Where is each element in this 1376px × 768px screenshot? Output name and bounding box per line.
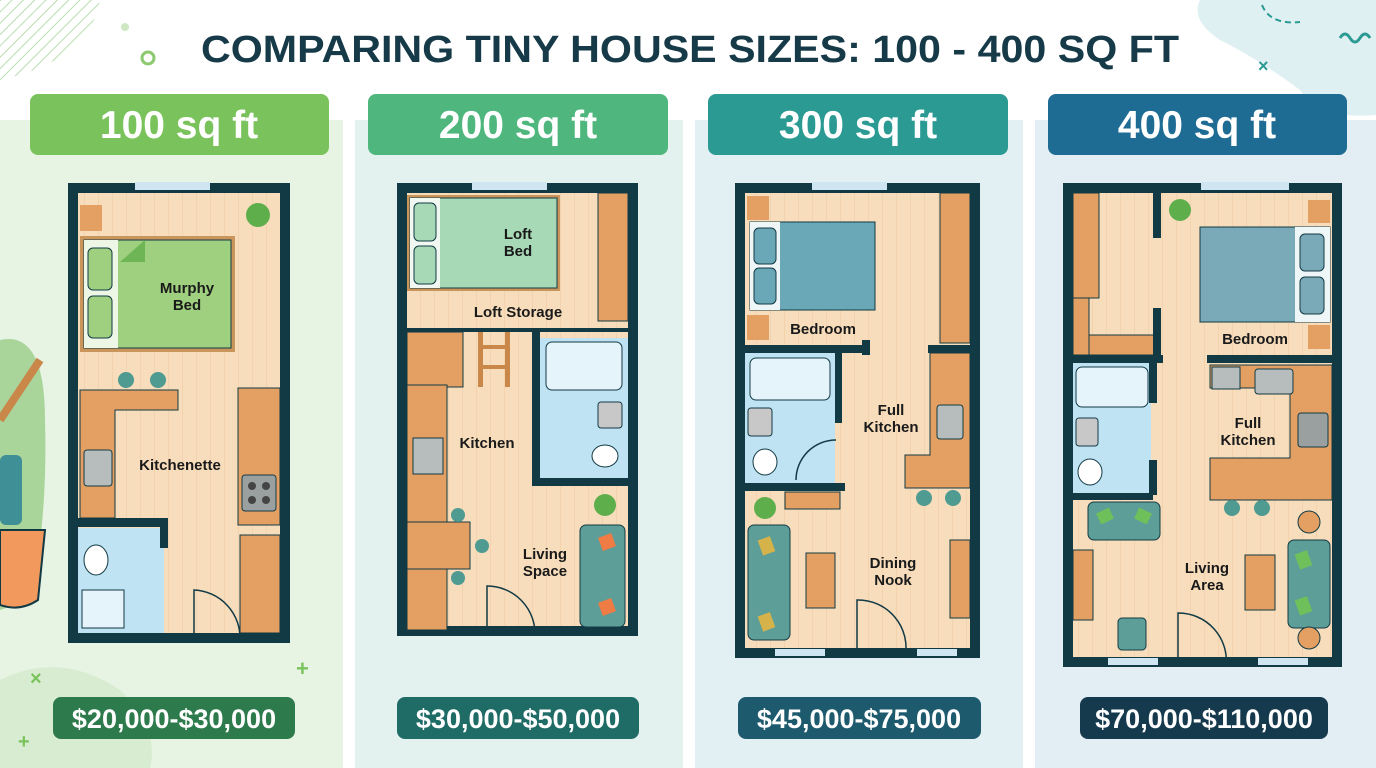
floor plan: 400 sq ft: Kitchen	[1220, 432, 1276, 449]
price: 200 sq ft	[397, 697, 639, 739]
price: 100 sq ft	[53, 697, 295, 739]
price: 400 sq ft	[1080, 697, 1328, 739]
floor plan: 200 sq ft	[397, 182, 638, 636]
floor plan: 100 sq ft: Kitchenette	[139, 457, 221, 474]
header: 200 sq ft	[368, 94, 668, 155]
floor plan: 100 sq ft: Murphy	[160, 280, 215, 297]
price: 400 sq ft: $70,000-$110,000	[1095, 704, 1313, 734]
floor plan: 400 sq ft: Full	[1235, 415, 1261, 432]
floor plan: 300 sq ft: Nook	[874, 572, 912, 589]
floor plan: 400 sq ft: Area	[1190, 577, 1224, 594]
floor plan: 300 sq ft: Bedroom	[790, 321, 856, 338]
header: 200 sq ft: 200 sq ft	[439, 104, 597, 147]
background decorations: +	[18, 731, 30, 753]
floor plan: 400 sq ft	[1063, 182, 1342, 667]
floor plan: 200 sq ft: Loft Storage	[474, 304, 562, 321]
floor plan: 200 sq ft: Kitchen	[459, 435, 515, 452]
header: 400 sq ft	[1048, 94, 1347, 155]
floor plan: 300 sq ft: Dining	[870, 555, 916, 572]
floor plan: 100 sq ft	[68, 182, 290, 643]
background decorations: ×	[30, 668, 42, 690]
price: 200 sq ft: $30,000-$50,000	[416, 704, 620, 734]
header: 300 sq ft	[708, 94, 1008, 155]
background decorations: +	[296, 656, 309, 681]
panel: 100 sq ft	[30, 94, 329, 739]
header: 100 sq ft: 100 sq ft	[100, 104, 258, 147]
price: 300 sq ft: $45,000-$75,000	[757, 704, 961, 734]
floor plan: 400 sq ft: Living	[1185, 560, 1229, 577]
floor plan: 200 sq ft: Living	[523, 546, 567, 563]
title: COMPARING TINY HOUSE SIZES: 100 - 400 SQ FT	[201, 29, 1179, 71]
panel: 200 sq ft	[368, 94, 668, 739]
floor plan: 400 sq ft: Bedroom	[1222, 331, 1288, 348]
floor plan: 100 sq ft: Bed	[173, 297, 201, 314]
floor plan: 300 sq ft: Kitchen	[863, 419, 919, 436]
floor plan: 300 sq ft: Full	[878, 402, 904, 419]
price: 100 sq ft: $20,000-$30,000	[72, 704, 276, 734]
panel: 300 sq ft	[708, 94, 1008, 739]
floor plan: 300 sq ft	[735, 182, 980, 658]
side illustration: cleaning supplies	[0, 339, 45, 610]
header: 300 sq ft: 300 sq ft	[779, 104, 937, 147]
header: 400 sq ft: 400 sq ft	[1118, 104, 1276, 147]
background decorations: ×	[1258, 56, 1269, 76]
price: 300 sq ft	[738, 697, 981, 739]
floor plan: 200 sq ft: Space	[523, 563, 567, 580]
panel: 400 sq ft	[1048, 94, 1347, 739]
floor plan: 200 sq ft: Bed	[504, 243, 532, 260]
floor plan: 200 sq ft: Loft	[504, 226, 532, 243]
header: 100 sq ft	[30, 94, 329, 155]
